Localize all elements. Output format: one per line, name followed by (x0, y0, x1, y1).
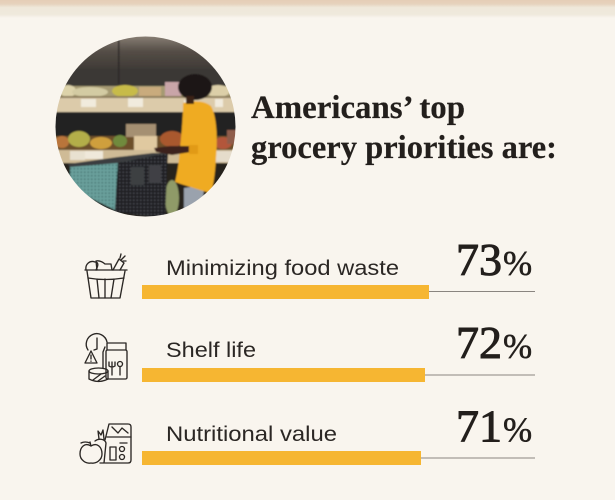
icon: basket of food (85, 254, 127, 298)
icon: apple, carrot and nutrition label (80, 424, 131, 463)
top decorative band (0, 0, 615, 18)
title: Americans’ top (251, 90, 465, 126)
title: grocery priorities are: (251, 130, 557, 166)
photo: shopper in grocery aisle (56, 36, 236, 216)
value line (429, 291, 535, 292)
row: shelf life (85, 317, 535, 382)
bar 73% (142, 285, 429, 299)
value line (421, 458, 535, 459)
label: Nutritional value (166, 422, 337, 446)
value 72%: 72% (456, 317, 532, 368)
row: nutritional value (80, 400, 535, 465)
label: Shelf life (166, 338, 256, 362)
row: minimizing food waste (85, 234, 535, 299)
value 73%: 73% (456, 234, 532, 285)
label: Minimizing food waste (166, 256, 399, 280)
bar 71% (142, 451, 421, 465)
value line (425, 374, 535, 376)
value 71%: 71% (456, 400, 532, 452)
icon: clock, warning, food packages (85, 334, 127, 382)
title (251, 90, 557, 166)
bar 72% (142, 368, 425, 382)
